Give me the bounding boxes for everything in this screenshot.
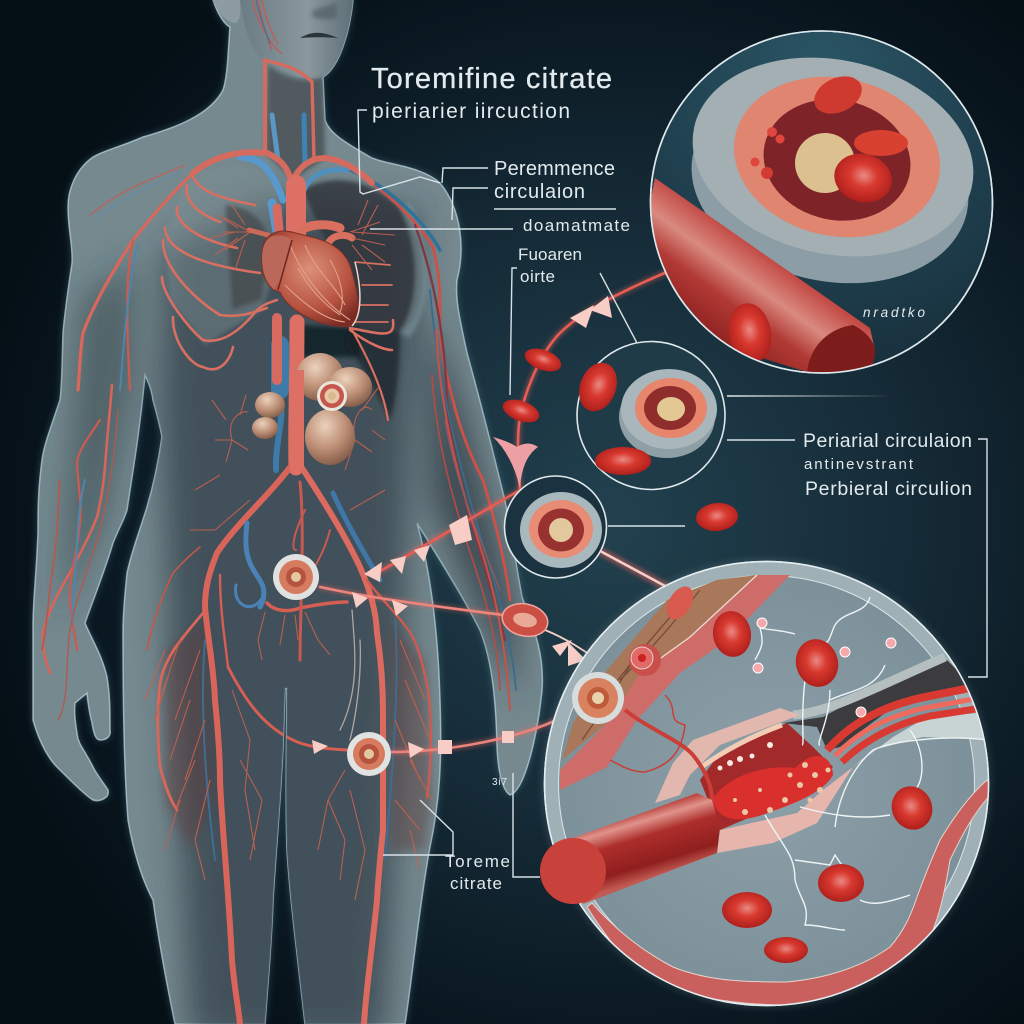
- label: toreme citrate: citrate: [450, 874, 502, 893]
- pelvic cross-section node: [273, 554, 319, 600]
- label: peripheral circulation block: Perbieral circulion: [805, 478, 972, 500]
- lungs and chest: [165, 166, 423, 420]
- human body figure: [33, 0, 542, 1024]
- wrist cross-section cell: [499, 600, 551, 640]
- red blood cells on upper connector: [500, 344, 564, 427]
- outer bottom vessel wall: [587, 780, 995, 1005]
- dark lumen wedge: [783, 660, 972, 750]
- red blood cells in disc: [814, 76, 862, 114]
- interior shading: [60, 200, 520, 1024]
- pale band below arteries: [854, 713, 983, 766]
- red arteries right: [827, 684, 995, 762]
- panel: middle cross-section circle: [573, 342, 725, 490]
- label: fuoaren oirte: Fuoaren: [518, 245, 582, 264]
- upper left vessel band: [562, 575, 757, 760]
- clot of cells: [712, 742, 833, 819]
- label: peripheral circulation block: [803, 430, 972, 500]
- label: dermatmate: doamatmate: [523, 216, 630, 235]
- small number: 3i7: [492, 777, 507, 788]
- thigh texture patches: [165, 620, 432, 850]
- pink vessel wall: [655, 708, 800, 803]
- panel: small cross-section circle: [504, 476, 606, 578]
- label: performance circulation: circulaion: [494, 181, 585, 203]
- drug capsule cylinder: [540, 793, 720, 904]
- cross-section node on bottom panel: [572, 672, 624, 724]
- panel: top magnified artery: [640, 31, 992, 373]
- nodule on vessel band: [629, 644, 661, 676]
- label: toreme citrate: Toreme: [445, 852, 510, 871]
- label: toreme citrate: [445, 852, 510, 893]
- capillary branches: [145, 200, 432, 900]
- branching arteries: [625, 710, 712, 800]
- body silhouette: [33, 0, 542, 1024]
- title: Toremifine citrate: [371, 63, 612, 95]
- label: fuoaren oirte: [518, 245, 582, 286]
- panel: bottom magnified vessel: [540, 560, 995, 1008]
- free red blood cell: [695, 501, 739, 533]
- caption: nradtko: [863, 305, 925, 320]
- glowing dots: [753, 618, 896, 717]
- face and neck: [213, 0, 353, 180]
- kidneys and abdominal organs: [252, 353, 372, 470]
- cross-section on organ: [317, 381, 347, 411]
- label: performance circulation: [494, 158, 615, 203]
- heart: [262, 231, 360, 327]
- red blood cells: [709, 608, 939, 963]
- label: performance circulation: Peremmence: [494, 158, 615, 180]
- ribs: [162, 177, 393, 420]
- subtitle: pieriarier iircuction: [372, 100, 570, 123]
- arm and shoulder vessels: [42, 162, 516, 720]
- vessel interior: [700, 723, 833, 830]
- body silhouette glow: [33, 0, 542, 1024]
- thigh cross-section node: [347, 732, 391, 776]
- connector lines: [320, 272, 667, 752]
- label: peripheral circulation block: antinevstrant: [804, 456, 914, 473]
- arrowheads on connectors: [312, 296, 612, 758]
- label: peripheral circulation block: Periarial circulaion: [803, 430, 972, 452]
- red blob on band: [667, 586, 693, 620]
- label: fuoaren oirte: oirte: [520, 267, 555, 286]
- artery tube: [640, 178, 875, 372]
- white nerve lines: [755, 597, 987, 930]
- leader lines: [358, 110, 987, 877]
- great vessels: [147, 60, 431, 1024]
